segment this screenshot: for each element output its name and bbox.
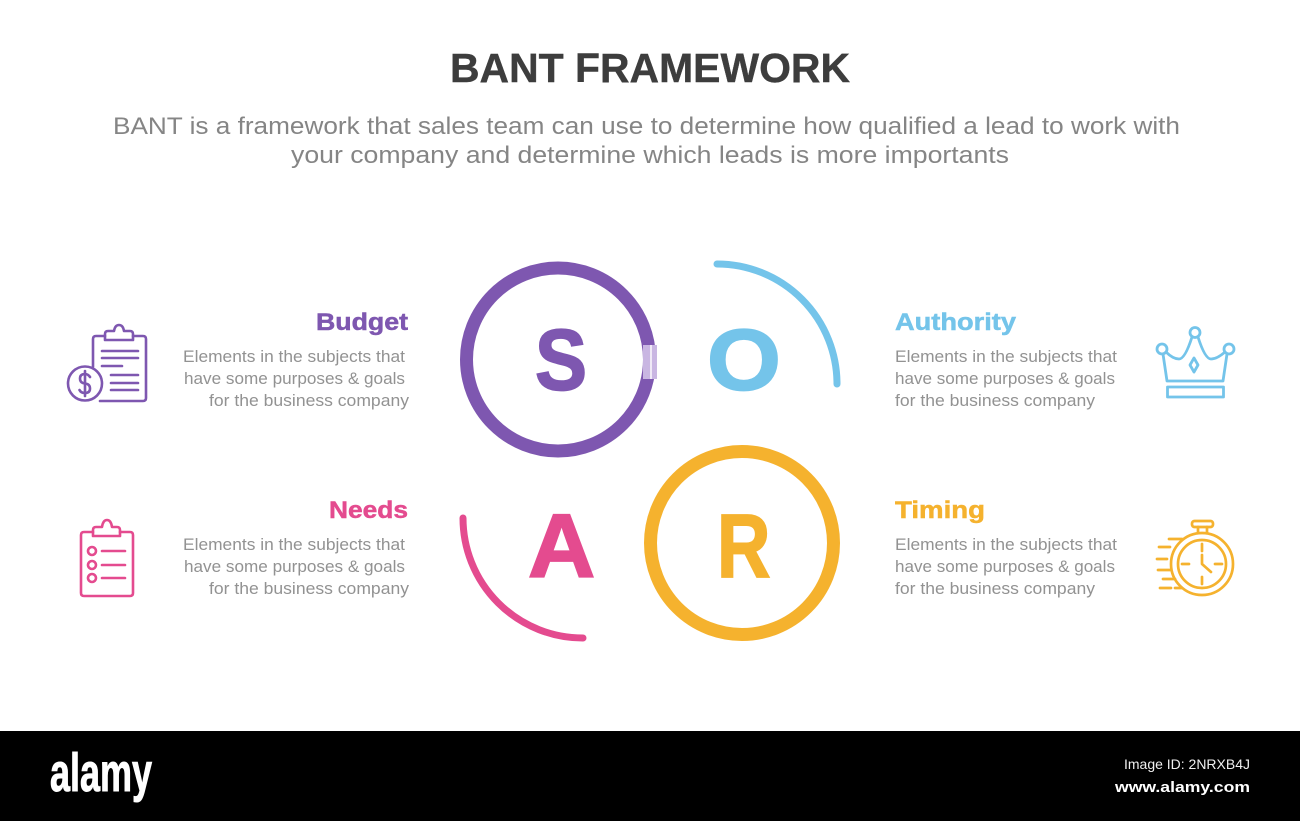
panel: O arc (Authority) [707,264,837,408]
text block: Budget: Budget [316,309,408,336]
text block: Authority: Elements in the subjects that [895,347,1117,366]
panel: R circle (Timing): R [717,496,770,597]
watermark band: www.alamy.com [1114,779,1250,796]
text block: Timing: have some purposes & goals [895,557,1115,576]
text block: Needs: Elements in the subjects that [183,535,405,554]
icon: timing stopwatch [1157,521,1233,595]
panel: O arc (Authority): O [707,313,781,408]
text block: Budget [183,309,410,410]
text block: Authority: Authority [895,309,1017,336]
watermark logo: alamy [50,743,152,803]
text block: Timing: for the business company [895,579,1096,598]
text block: Timing [895,497,1117,598]
text block: Budget: for the business company [209,391,410,410]
text block: Authority: for the business company [895,391,1096,410]
text block: Budget: Elements in the subjects that [183,347,405,366]
subtitle: your company and determine which leads is more importants [291,142,1009,169]
panel: S circle (Budget) [466,268,657,451]
icon: authority crown [1157,328,1234,397]
text block: Authority: have some purposes & goals [895,369,1115,388]
text block: Timing: Elements in the subjects that [895,535,1117,554]
subtitle [113,113,1180,169]
icon: budget clipboard with coin [68,325,146,401]
panel: R circle (Timing) [650,452,834,634]
text block: Needs: Needs [329,497,408,524]
title: BANT FRAMEWORK [450,45,850,91]
panel: S circle (Budget): S [535,313,587,408]
text block: Timing: Timing [895,497,985,524]
subtitle: BANT is a framework that sales team can use to determine how qualified a lead to work with [113,113,1180,140]
text block: Needs: have some purposes & goals [184,557,405,576]
panel: A arc (Needs): A [528,496,595,597]
text block: Budget: have some purposes & goals [184,369,405,388]
icon: needs checklist [81,520,133,596]
text block: Needs: for the business company [209,579,410,598]
watermark band: Image ID: 2NRXB4J [1124,756,1250,772]
panel: A arc (Needs) [463,496,595,638]
watermark band [0,731,1300,821]
text block: Authority [895,309,1117,410]
text block: Needs [183,497,410,598]
